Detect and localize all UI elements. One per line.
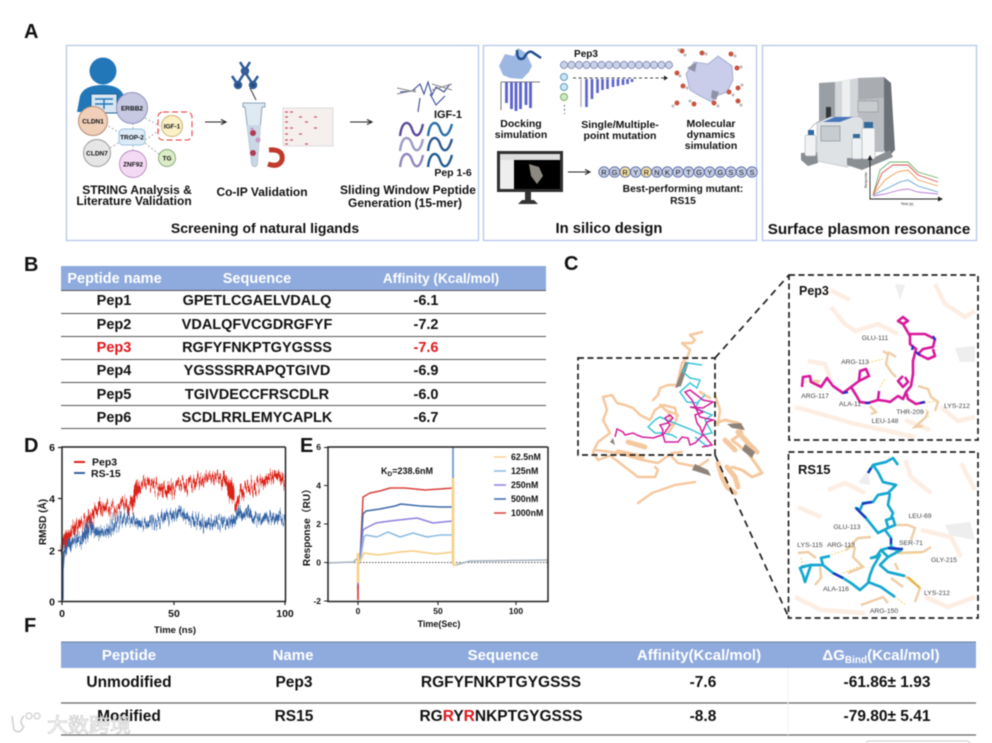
sensorgram traces <box>327 447 548 600</box>
watermark <box>12 713 131 737</box>
chart: SPR sensorgram <box>301 442 548 629</box>
row: unmodified: Pep3 <box>275 674 313 691</box>
chart: RMSD line chart <box>36 442 294 636</box>
ribbon shadow accents <box>610 362 755 476</box>
zoom guide lines <box>715 275 789 618</box>
table rows: TGIVDECCFRSCDLR <box>185 387 330 403</box>
icon: tube with beads and magnet <box>243 103 282 166</box>
RS15 bead chain <box>599 167 757 177</box>
KD annotation: =238.6nM <box>392 466 433 476</box>
tick labels: 0 <box>356 606 361 616</box>
baseline <box>327 562 548 564</box>
hydrogen bonds <box>801 547 921 605</box>
table header: ΔG <box>822 647 845 664</box>
table rows: SCDLRRLEMYCAPLK <box>182 410 333 426</box>
axes <box>62 447 286 602</box>
panel title: In silico design <box>556 221 662 237</box>
residue labels Pep3: LYS-212 <box>944 403 970 410</box>
panel letter A: A <box>24 21 38 43</box>
graph axis labels: Time (s) <box>901 202 913 206</box>
table header: Peptide name <box>67 271 162 287</box>
panel: surface plasmon resonance <box>762 46 976 240</box>
caption: best-performing mutant: RS15 <box>670 196 696 207</box>
table header: Affinity(Kcal/mol) <box>637 647 761 664</box>
residue options <box>560 74 568 114</box>
row: modified: -79.80± 5.41 <box>844 708 931 725</box>
table rows: Pep3 <box>97 340 131 356</box>
table header: (Kcal/mol) <box>867 647 940 664</box>
tick labels: 100 <box>276 608 294 620</box>
residue labels Pep3: ARG-117 <box>801 393 829 400</box>
RS15 residue letters: Y <box>633 168 638 177</box>
graph axis labels <box>864 172 913 206</box>
pocket residues <box>813 351 938 427</box>
tick labels: 100 <box>509 606 523 616</box>
tick labels <box>313 442 523 616</box>
label Pep 1-6: Pep 1-6 <box>434 167 472 179</box>
gel blot <box>283 108 333 146</box>
label IGF-1: IGF-1 <box>434 109 462 121</box>
table header <box>67 271 499 287</box>
panel letter C: C <box>564 253 578 275</box>
magenta peptide overview <box>615 390 713 447</box>
axis titles: Time(Sec) <box>418 619 460 629</box>
table rows: -6.0 <box>414 387 438 403</box>
icon: monitor <box>497 151 563 204</box>
table rows: -6.9 <box>414 363 438 379</box>
residue labels Pep3: LEU-148 <box>872 418 899 425</box>
cyan peptide overview <box>648 363 712 447</box>
RS15 residue letters: N <box>654 168 660 177</box>
tick labels: 50 <box>433 606 443 616</box>
chart: SPR sensorgram: Response（RU） <box>301 484 313 566</box>
watermark: 大数跨境 <box>47 714 131 737</box>
RS15 residue letters: R <box>601 168 607 177</box>
label Pep3: Pep3 <box>574 49 598 60</box>
node ERBB2: ERBB2 <box>121 106 143 112</box>
table rows: VDALQFVCGDRGFYF <box>182 317 332 333</box>
panel: docking structures <box>578 275 978 618</box>
sensorgram graph <box>868 155 943 202</box>
mutation scan bar chart <box>573 76 668 107</box>
tick labels: 6 <box>316 442 321 452</box>
table rows <box>97 293 438 426</box>
row: modified: Modified <box>97 708 161 725</box>
residue labels RS15: ARG-113 <box>827 542 855 549</box>
RS15 residue letters: P <box>675 168 681 177</box>
RS15 stick model <box>800 458 905 597</box>
tick labels: -2 <box>313 596 321 606</box>
RS15 residue letters: S <box>739 168 744 177</box>
residue labels RS15: LYS-212 <box>924 590 950 597</box>
peptide fragments <box>400 123 452 167</box>
RS15 residue letters: R <box>644 168 650 177</box>
caption: STRING analysis: Literature Validation <box>76 194 192 208</box>
residue labels RS15: LYS-115 <box>797 542 823 549</box>
faint background ribbons <box>795 284 975 437</box>
arrow <box>205 120 226 124</box>
cropped box at page bottom <box>866 741 970 743</box>
panel: in silico design <box>484 46 757 240</box>
icon: IGF-1 peptide with scissors <box>397 82 452 112</box>
RS-15 trace <box>65 512 285 550</box>
KD annotation: K <box>381 466 388 476</box>
residue labels Pep3: GLU-111 <box>862 335 889 342</box>
caption: mutation: Single/Multiple- <box>581 119 659 131</box>
RS15 residue letters <box>601 168 755 177</box>
pocket residues <box>798 525 931 605</box>
caption: sliding window: Sliding Window Peptide <box>340 183 476 197</box>
RS15 residue letters: G <box>612 168 618 177</box>
icon: docking protein <box>499 48 541 79</box>
legend: 1000nM <box>511 508 543 518</box>
icon: antibodies <box>232 62 258 100</box>
Pep3 stick model <box>802 317 935 404</box>
table rows: RGFYFNKPTGYGSSS <box>182 340 332 356</box>
hydrogen bonds <box>805 359 936 417</box>
row: unmodified: RGFYFNKPTGYGSSS <box>421 674 581 691</box>
table rows: Pep1 <box>97 293 131 309</box>
residue labels Pep3 <box>801 335 970 425</box>
tick labels: 0 <box>316 558 321 568</box>
tick labels: 4 <box>316 480 321 490</box>
caption: molecular dynamics: simulation <box>685 140 737 152</box>
table rows: -7.2 <box>414 317 438 333</box>
residue labels RS15: GLU-113 <box>833 524 861 531</box>
panel title: Surface plasmon resonance <box>768 221 970 238</box>
label Pep3: Pep3 <box>799 284 829 298</box>
table: modified vs unmodified <box>61 642 976 735</box>
table rows: Pep5 <box>97 387 131 403</box>
caption: sliding window: Generation (15-mer) <box>348 196 462 210</box>
RS15 residue letters: K <box>665 168 670 177</box>
chart: RMSD line chart: RMSD (Å) <box>36 499 49 545</box>
molecular dynamics protein in water <box>672 48 744 108</box>
RS15 residue letters: Y <box>707 168 712 177</box>
table rows: Pep6 <box>97 410 131 426</box>
RS15 residue letters: R <box>622 168 628 177</box>
row: modified <box>97 708 931 725</box>
table header <box>102 647 940 666</box>
axis titles: Time (ns) <box>154 625 196 636</box>
caption: docking simulation: Docking <box>500 118 542 130</box>
table header: Peptide <box>102 647 156 664</box>
table rows: -7.6 <box>414 340 438 356</box>
row: modified: -8.8 <box>690 708 717 725</box>
caption: molecular dynamics: dynamics <box>687 129 735 141</box>
nitrogen highlights Pep3 <box>843 336 935 403</box>
Pep3 trace <box>63 475 285 550</box>
RS15 residue letters: T <box>686 168 691 177</box>
caption: STRING analysis: STRING Analysis & <box>82 183 192 197</box>
node TROP-2: TROP-2 <box>120 134 144 142</box>
arrow <box>350 120 372 124</box>
row: modified: RGRYRNKPTGYGSSS <box>419 708 583 725</box>
string network <box>78 92 192 178</box>
table rows: Pep4 <box>97 363 131 379</box>
row: unmodified: -61.86± 1.93 <box>844 674 931 691</box>
inset: Pep3 <box>789 275 978 440</box>
faint background ribbons <box>795 460 975 613</box>
legend <box>494 452 543 518</box>
table: peptide affinity <box>61 266 546 428</box>
panel: screening of natural ligands <box>66 46 478 240</box>
RS15 residue letters: S <box>749 168 755 177</box>
RS15 residue letters: G <box>717 168 723 177</box>
caption: mutation: point mutation <box>584 130 656 142</box>
icon: researcher at laptop <box>77 58 126 113</box>
legend: 125nM <box>511 466 538 476</box>
caption: molecular dynamics: Molecular <box>686 118 736 130</box>
row: unmodified: Unmodified <box>86 674 172 691</box>
docking bar chart <box>501 82 540 111</box>
node TG: TG <box>162 156 172 162</box>
panel title: Screening of natural ligands <box>171 220 359 236</box>
node ZNF92: ZNF92 <box>123 162 143 168</box>
tick labels: 50 <box>168 608 180 620</box>
label RS15: RS15 <box>798 462 831 477</box>
RS-15 initial rise <box>63 548 66 600</box>
residue labels RS15: ARG-150 <box>870 608 898 615</box>
table rows: -6.1 <box>414 293 438 309</box>
tick labels: 2 <box>49 546 55 558</box>
caption: Co-IP validation: Co-IP Validation <box>216 185 308 199</box>
table header: Sequence <box>223 271 291 287</box>
caption: best-performing mutant: Best-performing mutant: <box>623 184 743 195</box>
tick labels <box>49 442 294 620</box>
KD annotation: D <box>388 471 392 478</box>
node CLDN7: CLDN7 <box>86 150 108 158</box>
legend: Pep3 <box>92 456 117 468</box>
inset: RS15 <box>788 452 978 618</box>
tick labels: 2 <box>316 519 321 529</box>
legend: RS-15 <box>91 468 121 480</box>
axes <box>328 447 548 602</box>
table rows: Pep2 <box>97 317 131 333</box>
row: unmodified <box>86 674 931 691</box>
table rows: YGSSSRRAPQTGIVD <box>184 363 330 379</box>
legend <box>74 456 121 480</box>
panel letter F: F <box>24 615 36 637</box>
node CLDN1: CLDN1 <box>82 118 104 126</box>
legend: 500nM <box>511 494 538 504</box>
panel letter D: D <box>24 435 38 457</box>
legend: 62.5nM <box>511 452 541 462</box>
residue labels RS15: ALA-116 <box>823 586 849 593</box>
residue labels RS15: LEU-69 <box>908 513 932 520</box>
node IGF-1 with red highlight: IGF-1 <box>164 124 181 130</box>
RS15 residue letters: S <box>728 168 733 177</box>
icon: SPR instrument <box>801 77 895 170</box>
row: unmodified: -7.6 <box>690 674 717 691</box>
table header: Bind <box>845 655 867 666</box>
tick labels: 6 <box>49 442 55 454</box>
legend: 250nM <box>511 480 538 490</box>
residue labels Pep3: ARG-113 <box>841 359 869 366</box>
panel letter E: E <box>300 435 313 457</box>
table rows: -6.7 <box>414 410 438 426</box>
nitrogen highlights RS15 <box>833 468 903 578</box>
table header: Sequence <box>468 647 538 664</box>
panel letter B: B <box>24 254 38 276</box>
residue labels RS15: SER-71 <box>899 540 923 547</box>
arrow <box>568 170 590 174</box>
residue labels Pep3: ALA-11 <box>839 401 861 408</box>
caption: docking simulation: simulation <box>495 129 547 141</box>
residue labels RS15 <box>797 513 957 615</box>
table header: Name <box>273 647 313 664</box>
residue labels Pep3: THR-209 <box>896 409 924 416</box>
residue labels RS15: GLY-215 <box>931 557 957 564</box>
overview selection box <box>578 358 715 455</box>
protein ribbon overview <box>593 332 762 503</box>
tick labels: 0 <box>49 596 55 608</box>
tick labels: 4 <box>49 494 55 506</box>
Pep3 bead chain <box>560 61 673 69</box>
table rows: GPETLCGAELVDALQ <box>183 293 331 309</box>
graph axis labels: Response <box>864 172 868 188</box>
row: modified: RS15 <box>275 708 314 725</box>
RS15 residue letters: G <box>696 168 702 177</box>
tick labels: 0 <box>59 608 65 620</box>
table header: Affinity (Kcal/mol) <box>383 271 499 286</box>
